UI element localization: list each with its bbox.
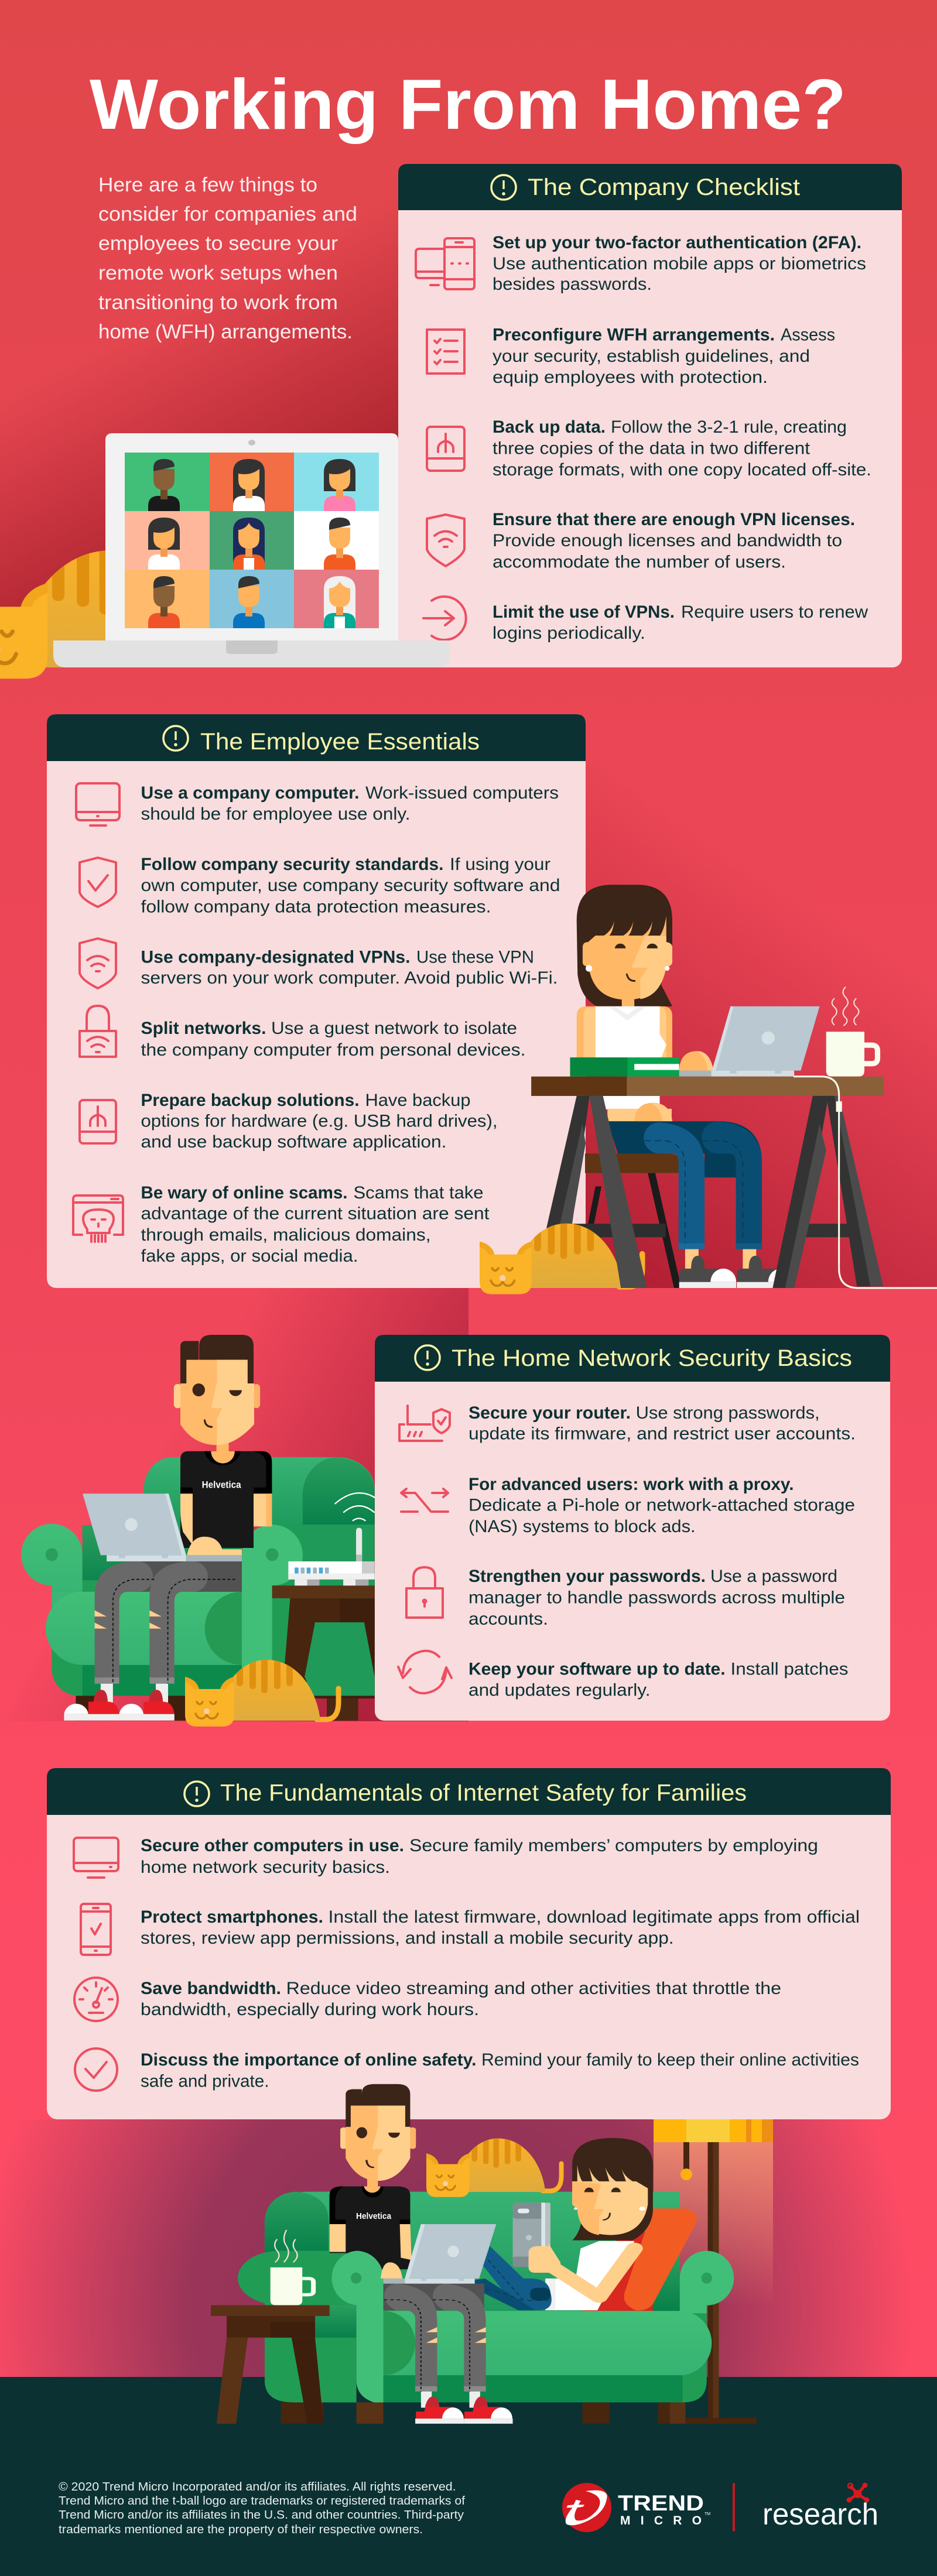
text: limit vpns	[493, 602, 868, 643]
text: two-factor authentication: Set up your two-factor authentication (2FA).	[493, 233, 861, 252]
cat: under the desk	[480, 1220, 642, 1294]
text: limit vpns: Require users to renew	[681, 602, 868, 622]
icon: computer	[74, 1838, 118, 1878]
text: strengthen passwords	[468, 1567, 845, 1629]
text: secure other computers: home network security basics.	[141, 1858, 390, 1877]
text: online scams	[141, 1183, 490, 1266]
icon: scam window with skull	[73, 1195, 123, 1242]
intro text: transitioning to work from	[98, 292, 338, 314]
woman	[577, 885, 672, 1121]
legal text: Trend Micro and/or its affiliates in the U.S. and other countries. Third-party	[59, 2509, 464, 2522]
text: security standards	[141, 855, 560, 916]
text: online scams: fake apps, or social media.	[141, 1246, 358, 1266]
text: secure your router: Secure your router.	[468, 1403, 631, 1423]
panel: the company checklist	[398, 164, 902, 667]
icon: padlock	[406, 1567, 443, 1618]
intro text: employees to secure your	[98, 232, 338, 255]
intro text: consider for companies and	[98, 203, 357, 225]
icon: smartphone	[81, 1904, 111, 1955]
router	[288, 1493, 375, 1585]
text: back up data: storage formats, with one copy located off-site.	[493, 460, 871, 479]
text: secure your router	[468, 1403, 856, 1444]
text: vpn licenses	[493, 510, 855, 571]
person: dark-skinned man, red shirt	[148, 576, 180, 628]
desk with book, laptop and mug	[531, 987, 884, 1096]
panel: the home network security basics	[375, 1335, 890, 1721]
text: security standards: follow company data protection measures.	[141, 897, 491, 916]
desk far trestle leg	[533, 1096, 590, 1288]
text: secure other computers: Secure family members’ computers by employing	[409, 1836, 818, 1855]
text: save bandwidth: bandwidth, especially during work hours.	[141, 2000, 479, 2019]
person: woman, white top on salmon	[148, 518, 180, 570]
icon: devices	[416, 238, 474, 289]
person: man, blue shirt	[233, 576, 265, 628]
text: back up data: Follow the 3-2-1 rule, creating	[611, 417, 847, 437]
chair	[573, 1153, 681, 1288]
text: protect smartphones: stores, review app permissions, and install a mobile security app.	[141, 1928, 674, 1948]
desk trestles and cable	[590, 1077, 937, 1288]
person: woman, white hair, teal jacket	[324, 576, 355, 628]
text: security standards: own computer, use company security software and	[141, 876, 560, 895]
icon: shield wifi	[80, 938, 116, 988]
cat: by the sofa	[185, 1656, 338, 1727]
text: protect smartphones	[141, 1907, 860, 1948]
shirt label: Helvetica	[356, 2211, 392, 2221]
text: two-factor authentication	[493, 233, 866, 294]
intro text	[98, 174, 357, 343]
heading: home network security basics: The Home Network Security Basics	[452, 1345, 852, 1371]
illustration: family on sofa	[211, 2084, 734, 2424]
text: back up data: three copies of the data in two different	[493, 439, 811, 458]
text: company vpns: servers on your work computer. Avoid public Wi-Fi.	[141, 968, 558, 988]
text: preconfigure arrangements: Assess	[781, 326, 835, 344]
text: save bandwidth: Reduce video streaming and other activities that throttle the	[286, 1979, 781, 1998]
man's legs and shoes	[384, 2284, 513, 2424]
text: company vpns: Use company-designated VPNs.	[141, 947, 410, 967]
text: vpn licenses: Ensure that there are enough VPN licenses.	[493, 510, 855, 529]
text: work with a proxy	[468, 1475, 855, 1536]
text: keep software up to date: Install patches	[731, 1659, 848, 1679]
icon: backup drive	[80, 1100, 116, 1143]
text: vpn licenses: Provide enough licenses and bandwidth to	[493, 531, 842, 550]
laptop on lap	[83, 1493, 242, 1561]
text: keep software up to date: Keep your software up to date.	[468, 1659, 726, 1679]
text: company computer: Work-issued computers	[365, 783, 559, 803]
text: strengthen passwords: Strengthen your passwords.	[468, 1567, 706, 1586]
text: discuss online safety: safe and private.	[141, 2071, 269, 2091]
text: limit vpns: logins periodically.	[493, 624, 645, 643]
legal text: © 2020 Trend Micro Incorporated and/or its affiliates. All rights reserved.	[59, 2481, 456, 2493]
person: woman, navy hair	[233, 518, 265, 570]
text: keep software up to date	[468, 1659, 848, 1700]
text: back up data: Back up data.	[493, 417, 606, 437]
text: online scams: Be wary of online scams.	[141, 1183, 348, 1203]
text: preconfigure arrangements	[493, 326, 835, 387]
text: work with a proxy: (NAS) systems to block ads.	[468, 1517, 696, 1536]
icon: lock wifi	[80, 1006, 116, 1057]
icon: shield wifi	[427, 515, 464, 566]
icon: monitor	[76, 783, 119, 825]
sofa	[21, 1457, 375, 1696]
person: woman, white top	[233, 459, 265, 511]
text: split networks: Use a guest network to isolate	[271, 1019, 517, 1038]
person: man on white	[324, 518, 355, 570]
person: dark-skinned man, black shirt	[148, 459, 180, 511]
icon: login arrow	[423, 597, 466, 640]
text: protect smartphones: Install the latest firmware, download legitimate apps from official	[328, 1907, 860, 1927]
heading: fundamentals of internet safety: The Fundamentals of Internet Safety for Families	[220, 1780, 747, 1806]
text: preconfigure arrangements: your security, establish guidelines, and	[493, 347, 810, 366]
sofa legs	[76, 1696, 186, 1721]
legal text	[59, 2481, 465, 2536]
intro text: remote work setups when	[98, 262, 338, 285]
heading: the employee essentials: The Employee Essentials	[200, 729, 480, 755]
man	[174, 1335, 272, 1548]
icon: shield check	[80, 858, 116, 907]
text: security standards: If using your	[450, 855, 550, 874]
logo: trend micro: TREND	[618, 2491, 704, 2515]
sofa seat and arms	[384, 2250, 734, 2375]
text: security standards: Follow company security standards.	[141, 855, 444, 874]
person: woman, pink top	[324, 459, 355, 511]
logo: research	[762, 2482, 878, 2532]
icon: proxy arrows	[401, 1489, 448, 1512]
text: strengthen passwords: manager to handle passwords across multiple	[468, 1588, 845, 1608]
logo: trend micro	[562, 2483, 710, 2532]
text: split networks	[141, 1019, 526, 1060]
floor lamp	[654, 2119, 773, 2424]
text: online scams: through emails, malicious domains,	[141, 1225, 431, 1245]
text: keep software up to date: and updates regularly.	[468, 1681, 650, 1700]
text: backup solutions: Have backup	[365, 1091, 471, 1110]
text: vpn licenses: accommodate the number of users.	[493, 553, 786, 571]
text: limit vpns: Limit the use of VPNs.	[493, 602, 675, 622]
laptop with video call	[53, 433, 450, 667]
man's legs	[64, 1537, 242, 1721]
text: save bandwidth	[141, 1979, 781, 2019]
text: back up data	[493, 417, 871, 479]
text: secure your router: update its firmware, and restrict user accounts.	[468, 1424, 856, 1444]
icon: checklist	[427, 330, 464, 374]
sofa back and frame	[238, 2192, 707, 2424]
text: secure other computers	[141, 1836, 818, 1877]
sofa front arm	[331, 2250, 384, 2402]
text: secure other computers: Secure other computers in use.	[141, 1836, 404, 1855]
text: save bandwidth: Save bandwidth.	[141, 1979, 281, 1998]
intro text: Here are a few things to	[98, 174, 317, 196]
illustration: man on sofa with router	[21, 1335, 375, 1721]
text: two-factor authentication: Use authentication mobile apps or biometrics	[493, 254, 866, 273]
text: discuss online safety: Remind your family to keep their online activities	[481, 2050, 859, 2070]
text: strengthen passwords: Use a password	[710, 1567, 837, 1586]
text: split networks: Split networks.	[141, 1019, 266, 1038]
man, seated	[330, 2084, 416, 2269]
shirt label: Helvetica	[202, 1479, 241, 1491]
title: Working From Home?	[90, 64, 846, 144]
text: discuss online safety: Discuss the importance of online safety.	[141, 2050, 477, 2070]
text: backup solutions: and use backup software application.	[141, 1132, 446, 1152]
logo: trend micro: TM	[705, 2512, 710, 2516]
laptop on lap	[381, 2224, 496, 2284]
divider	[733, 2483, 735, 2532]
text: work with a proxy: For advanced users: work with a proxy.	[468, 1475, 794, 1494]
text: preconfigure arrangements: Preconfigure WFH arrangements.	[493, 326, 775, 344]
panel: the employee essentials	[47, 714, 586, 1288]
text: company vpns	[141, 947, 558, 988]
text: company computer: should be for employee use only.	[141, 804, 410, 824]
text: secure your router: Use strong passwords,	[636, 1403, 820, 1423]
intro text: home (WFH) arrangements.	[98, 321, 353, 343]
text: split networks: the company computer from personal devices.	[141, 1040, 526, 1060]
legal text: trademarks mentioned are the property of their respective owners.	[59, 2523, 423, 2536]
text: two-factor authentication: besides passwords.	[493, 275, 652, 294]
legal text: Trend Micro and the t-ball logo are trademarks or registered trademarks of	[59, 2495, 465, 2508]
icon: sync arrows	[398, 1651, 452, 1693]
text: company vpns: Use these VPN	[416, 947, 534, 967]
text: backup solutions: Prepare backup solutions.	[141, 1091, 360, 1110]
illustration: woman working at desk	[531, 885, 884, 1288]
cat: on the sofa back	[426, 2135, 562, 2197]
cat: sleeping on the left edge	[0, 550, 105, 679]
text: backup solutions: options for hardware (e.g. USB hard drives),	[141, 1111, 498, 1131]
text: online scams: advantage of the current situation are sent	[141, 1204, 490, 1224]
text: preconfigure arrangements: equip employees with protection.	[493, 368, 768, 387]
side table	[272, 1585, 375, 1721]
icon: check circle	[75, 2049, 117, 2091]
icon: backup drive	[427, 427, 464, 471]
logo: research: research	[762, 2498, 878, 2532]
text: work with a proxy: Dedicate a Pi-hole or network-attached storage	[468, 1495, 855, 1515]
panel: the fundamentals of internet safety for families	[47, 1768, 891, 2119]
icon: speed gauge	[74, 1978, 118, 2021]
logo: trend micro: MICRO	[620, 2514, 702, 2527]
text: company computer: Use a company computer.	[141, 783, 360, 803]
woman, reclining	[461, 2138, 697, 2311]
text: protect smartphones: Protect smartphones.	[141, 1907, 323, 1927]
text: company computer	[141, 783, 559, 824]
heading: the company checklist: The Company Checklist	[528, 174, 800, 200]
text: discuss online safety	[141, 2050, 859, 2091]
text: online scams: Scams that take	[354, 1183, 484, 1203]
icon: router with shield	[399, 1406, 450, 1441]
text: backup solutions	[141, 1091, 498, 1152]
text: strengthen passwords: accounts.	[468, 1609, 548, 1629]
jeans and shoes	[607, 1121, 794, 1288]
side table with mug	[211, 2230, 330, 2424]
